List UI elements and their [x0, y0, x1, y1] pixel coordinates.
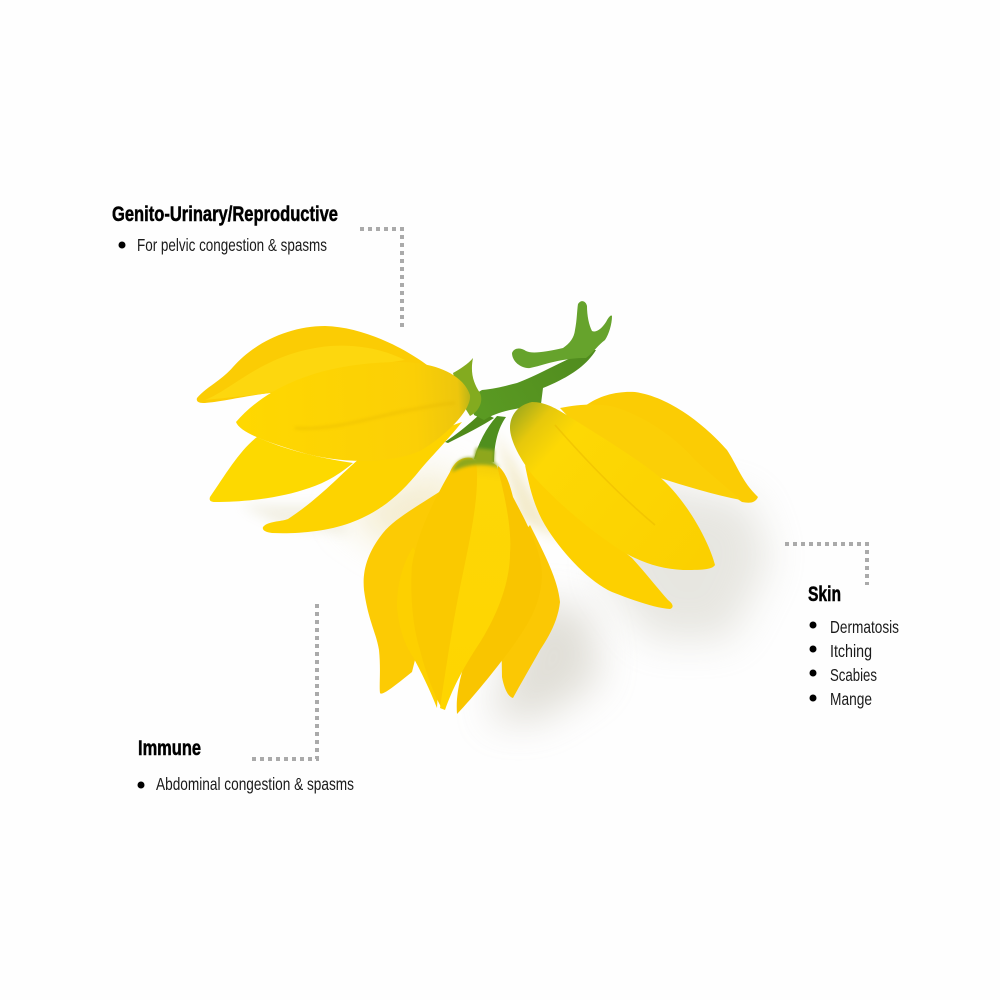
petal: main crease: [295, 403, 455, 428]
bottom flower: [364, 448, 560, 714]
list: For pelvic congestion & spasms: [137, 235, 327, 255]
list: Itching: [830, 641, 872, 661]
callout: Genito-Urinary/Reproductive: [112, 203, 402, 327]
calyx: [452, 448, 500, 472]
soft shadow under flower: [240, 430, 770, 720]
petal: lower: [525, 465, 673, 609]
left flower: [197, 326, 470, 533]
stem: [445, 301, 612, 462]
illustration: ylang-ylang flower: [197, 301, 758, 714]
petal: right: [457, 466, 542, 714]
list: Dermatosis: [830, 617, 899, 637]
callout: Immune: [138, 604, 354, 794]
heading: Skin: [808, 583, 841, 606]
petal: main crease: [555, 425, 655, 525]
right flower: [510, 392, 758, 609]
petal: middle: [560, 404, 741, 500]
petal: main: [510, 402, 715, 570]
list: [810, 617, 899, 709]
leader line: [252, 604, 317, 759]
petal: lower left: [210, 437, 353, 502]
leader line: [785, 544, 867, 585]
list: Abdominal congestion & spasms: [156, 774, 354, 794]
petal: back upper inner: [205, 346, 405, 400]
heading: Genito-Urinary/Reproductive: [112, 203, 338, 226]
callout: Skin: [785, 544, 899, 709]
petal: main: [236, 362, 470, 461]
petal: back upper: [197, 326, 436, 403]
petal: second left: [397, 547, 443, 708]
petal: lower: [263, 422, 462, 533]
petal: back: [585, 392, 758, 503]
petal: back left: [364, 488, 445, 694]
heading: Immune: [138, 737, 201, 760]
petal: back right: [500, 525, 560, 698]
petal: main right: [440, 460, 510, 710]
leader line: [360, 229, 402, 327]
list: Scabies: [830, 665, 877, 685]
petal: main left: [411, 458, 492, 709]
list: Mange: [830, 689, 872, 709]
